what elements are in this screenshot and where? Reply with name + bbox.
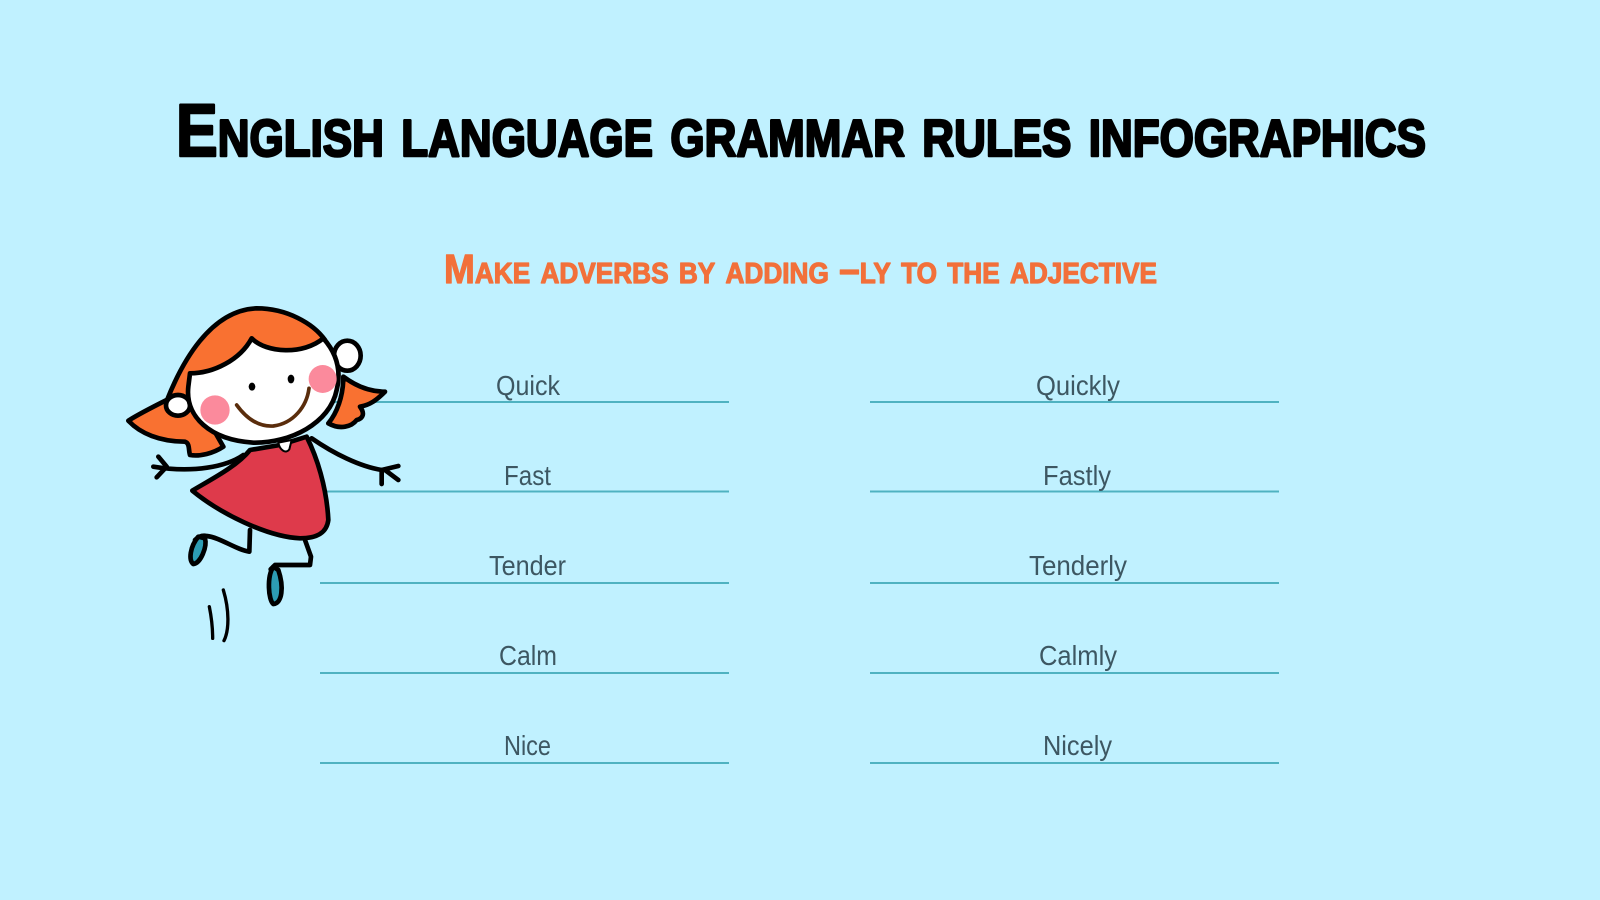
dress [192, 437, 328, 538]
row: Calmly: Calmly [1039, 640, 1117, 671]
hair top fill [167, 308, 325, 403]
row: Quick: Quick [496, 370, 561, 401]
arms [153, 438, 398, 484]
motion marks [209, 590, 228, 641]
row: Calm: Calm [499, 640, 557, 671]
right ear [334, 341, 361, 371]
collar [278, 440, 292, 451]
cheeks [200, 365, 337, 425]
hair back left [128, 390, 223, 455]
left ear [166, 395, 190, 416]
row: Fastly: Fastly [1043, 460, 1111, 491]
legs and shoes [191, 530, 311, 604]
subtitle: Make adverbs by adding –ly to the adjective [444, 246, 1157, 292]
row: Nice: Nice [504, 730, 551, 761]
row: Quickly: Quickly [1036, 370, 1120, 401]
row: Nicely: Nicely [1043, 730, 1112, 761]
icon: jumping girl illustration [128, 308, 398, 641]
face [188, 338, 339, 443]
adjectives column [320, 370, 729, 763]
row: Tender: Tender [489, 550, 566, 581]
eyes [249, 375, 294, 391]
row: Fast: Fast [504, 460, 551, 491]
hair top outline [167, 308, 325, 399]
hair right [328, 377, 385, 427]
smile [237, 388, 309, 426]
row: Tenderly: Tenderly [1029, 550, 1127, 581]
adverbs column [870, 370, 1279, 763]
